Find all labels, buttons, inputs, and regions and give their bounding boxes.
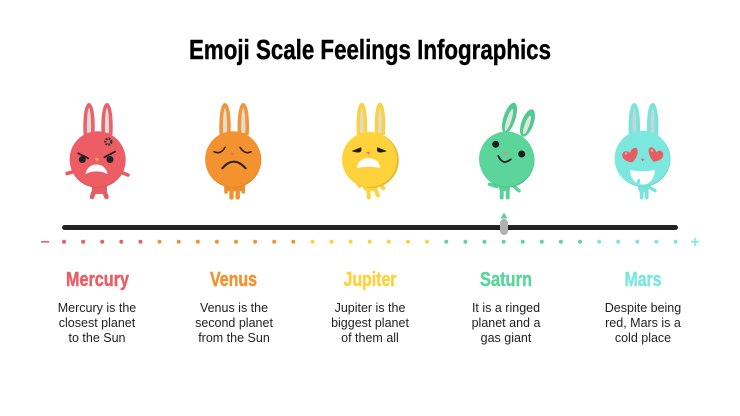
- minus sign: [41, 241, 49, 243]
- scale dots: [62, 240, 678, 244]
- icon: sad orange bunny: [205, 103, 261, 198]
- text: Mars description: red, Mars is a: [605, 316, 681, 330]
- heading: Mercury: Mercury: [66, 269, 130, 291]
- text: Mercury description: closest planet: [59, 316, 136, 330]
- title: Emoji Scale Feelings Infographics: [189, 34, 551, 65]
- text: Venus description: second planet: [195, 316, 273, 330]
- text: Jupiter description: biggest planet: [331, 316, 409, 330]
- icon: angry red bunny: [67, 103, 128, 197]
- text: Mercury description: Mercury is the: [58, 301, 136, 315]
- icon: happy green bunny: [479, 101, 538, 198]
- text: Saturn description: gas giant: [481, 331, 532, 345]
- text: Mars description: Despite being: [605, 301, 681, 315]
- heading: Venus: Venus: [210, 269, 257, 291]
- icon: worried yellow bunny: [342, 103, 399, 198]
- text: Jupiter description: Jupiter is the: [335, 301, 405, 315]
- heading: Mars: Mars: [624, 269, 662, 291]
- text: Mercury description: to the Sun: [68, 331, 126, 345]
- text: Venus description: Venus is the: [200, 301, 268, 315]
- slider handle: [500, 212, 508, 235]
- heading: Saturn: Saturn: [480, 269, 532, 291]
- slider track: [64, 225, 676, 230]
- plus sign: [691, 238, 699, 246]
- text: Mars description: cold place: [615, 331, 671, 345]
- text: Saturn description: It is a ringed: [472, 301, 540, 315]
- text: Saturn description: planet and a: [472, 316, 540, 330]
- heading: Jupiter: Jupiter: [344, 269, 397, 291]
- text: Venus description: from the Sun: [198, 331, 270, 345]
- text: Jupiter description: of them all: [341, 331, 399, 345]
- icon: in-love teal bunny: [615, 103, 670, 198]
